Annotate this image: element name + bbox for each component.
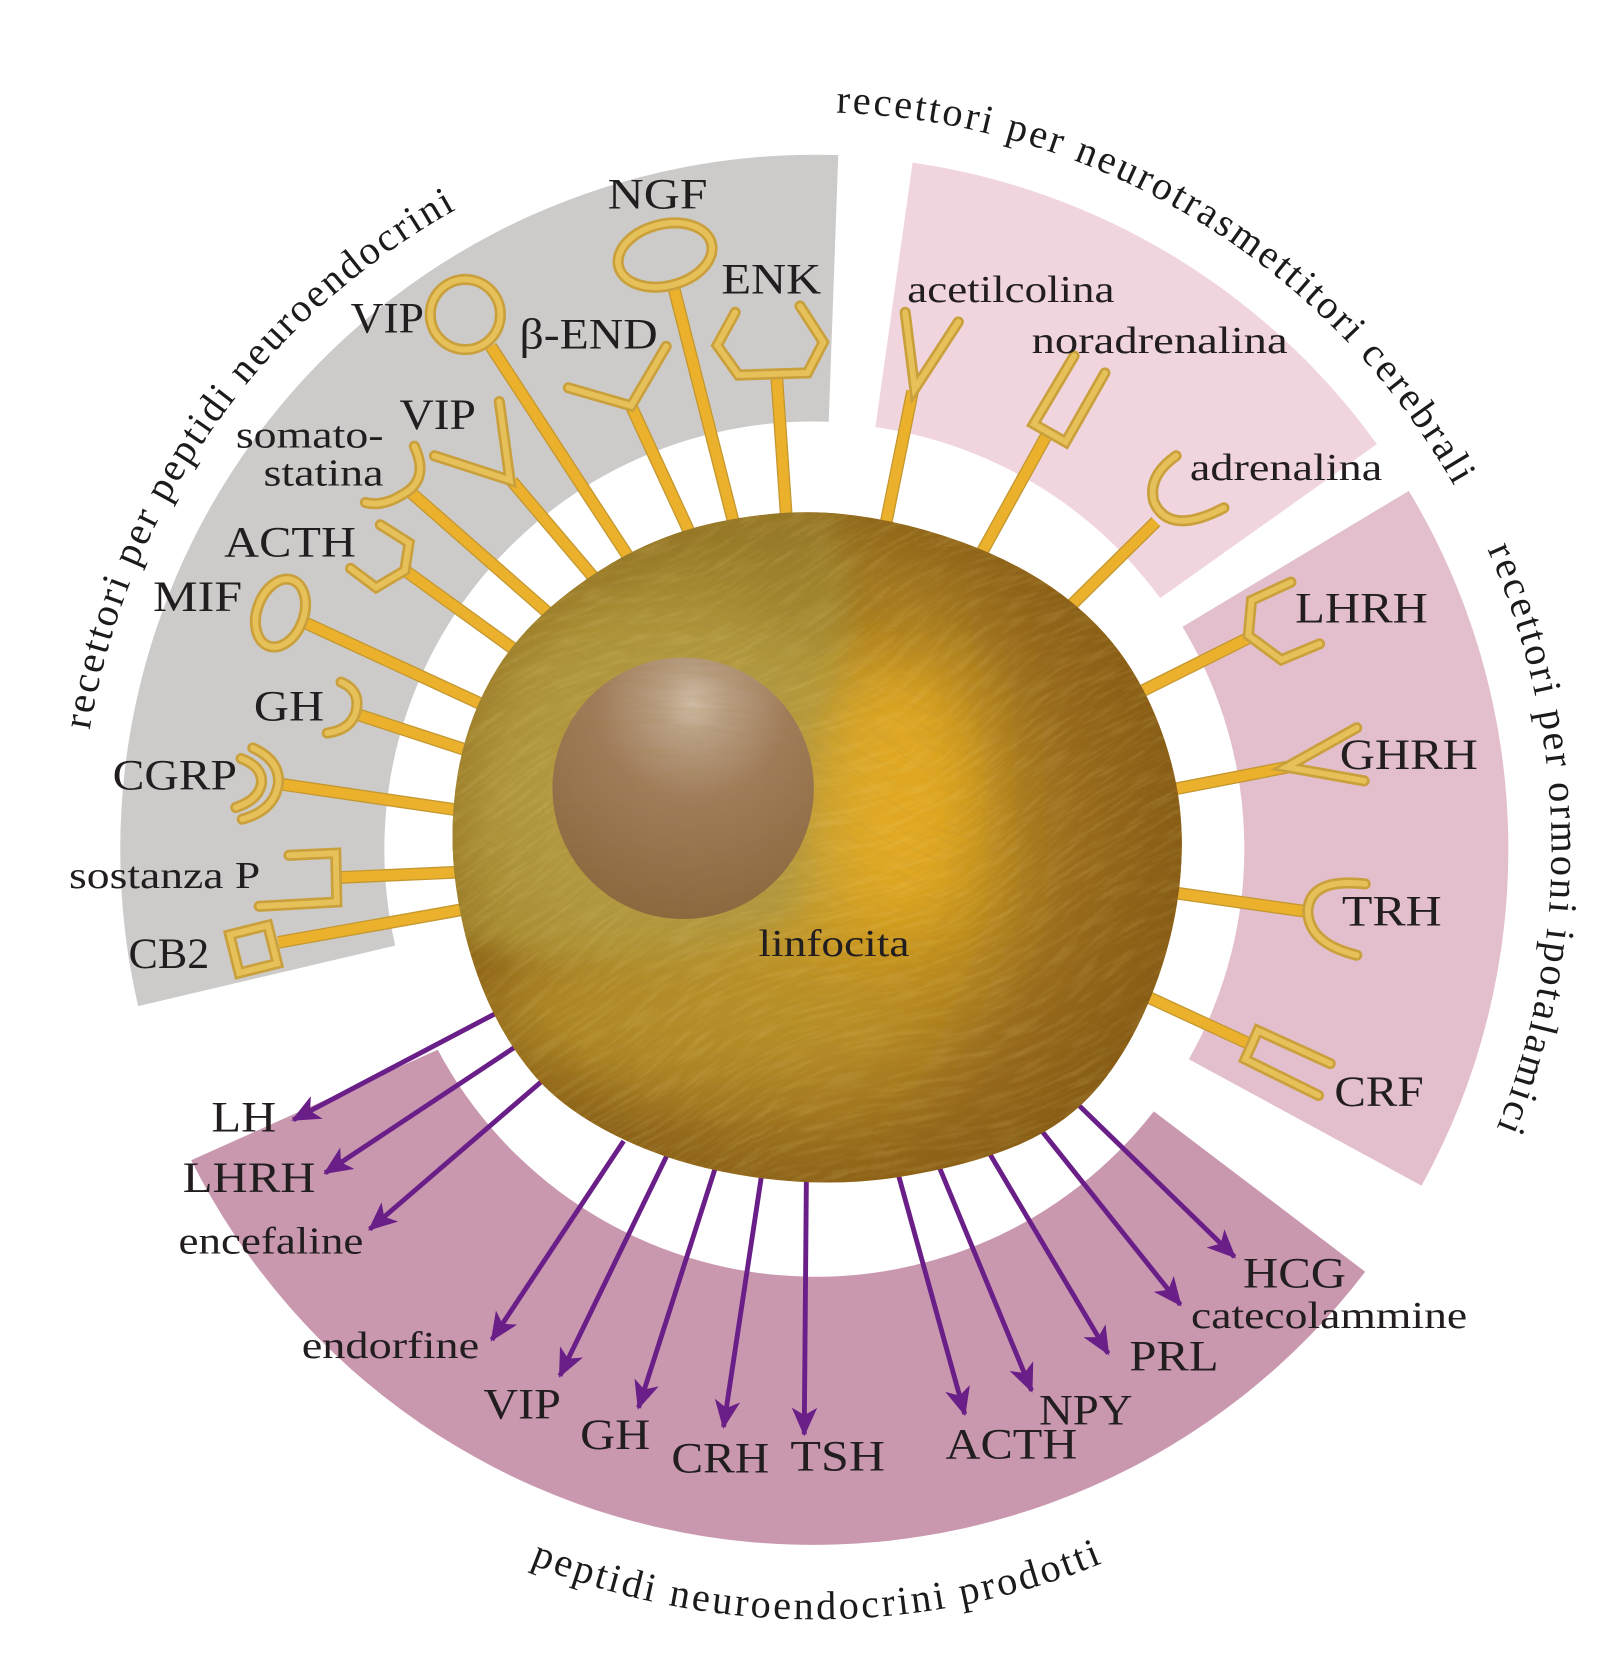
product labels: TSH bbox=[790, 1432, 885, 1480]
receptor labels: grey panel: ENK bbox=[721, 255, 821, 303]
receptor labels: grey panel: statina bbox=[263, 453, 384, 495]
receptor: CB2 bbox=[230, 909, 463, 973]
product labels: CRH bbox=[671, 1435, 769, 1483]
panel: recettori per neurotrasmettitori cerebrali bbox=[875, 163, 1377, 598]
receptor: ENK bbox=[717, 306, 823, 514]
product labels: endorfine bbox=[302, 1325, 479, 1367]
receptor: GH bbox=[327, 682, 466, 750]
receptor labels: neurotransmitters: adrenalina bbox=[1190, 447, 1382, 489]
receptor: ACTH bbox=[351, 525, 523, 656]
receptor: TRH bbox=[1172, 883, 1365, 955]
receptor labels: hypothalamic hormones: TRH bbox=[1342, 887, 1442, 935]
cell: nucleus bbox=[552, 658, 814, 919]
receptor: MIF bbox=[247, 572, 487, 707]
receptor: acetilcolina bbox=[885, 312, 958, 528]
receptor labels: hypothalamic hormones bbox=[1295, 585, 1478, 1116]
panel: recettori per peptidi neuroendocrini bbox=[120, 155, 838, 1006]
heading: peptidi neuroendocrini prodotti: peptidi neuroendocrini prodotti bbox=[528, 1540, 1102, 1620]
receptor labels: grey panel: CGRP bbox=[113, 751, 237, 799]
product labels: ACTH bbox=[946, 1421, 1077, 1469]
receptor labels: grey panel: GH bbox=[254, 682, 324, 730]
receptor labels: neurotransmitters: acetilcolina bbox=[907, 269, 1115, 311]
receptor labels: neurotransmitters bbox=[907, 269, 1382, 489]
receptor labels: neurotransmitters: noradrenalina bbox=[1032, 320, 1288, 362]
heading: recettori per ormoni ipotalamici: recettori per ormoni ipotalamici bbox=[1488, 542, 1576, 1134]
product labels: HCG bbox=[1243, 1250, 1346, 1298]
receptor: adrenalina bbox=[1071, 456, 1224, 606]
receptor labels: grey panel: sostanza P bbox=[69, 855, 260, 897]
receptor: CGRP bbox=[236, 748, 455, 819]
receptor: NGF bbox=[611, 214, 733, 521]
receptor labels: hypothalamic hormones: LHRH bbox=[1295, 585, 1428, 633]
label: linfocita: linfocita bbox=[759, 923, 909, 965]
receptor labels: grey panel: VIP bbox=[351, 295, 424, 343]
product labels: encefaline bbox=[178, 1221, 363, 1263]
receptor labels: grey panel: somato- bbox=[236, 414, 384, 456]
product labels: NPY bbox=[1039, 1387, 1133, 1435]
heading: recettori per neurotrasmettitori cerebrali: recettori per neurotrasmettitori cerebrali bbox=[836, 94, 1475, 486]
cell: linfocita body bbox=[452, 512, 1182, 1182]
receptor: CRF bbox=[1140, 993, 1330, 1095]
product labels: VIP bbox=[483, 1380, 561, 1428]
receptor: somatostatina bbox=[365, 446, 557, 620]
product labels: PRL bbox=[1129, 1333, 1219, 1381]
receptor: noradrenalina bbox=[981, 356, 1105, 555]
arrows: peptidi prodotti bbox=[293, 1010, 1235, 1434]
receptor: beta-END bbox=[568, 346, 688, 530]
product labels bbox=[178, 1094, 1467, 1483]
receptor: VIP ring bbox=[430, 279, 629, 558]
receptor: sostanza P bbox=[259, 853, 457, 906]
receptor labels: grey panel: VIP bbox=[399, 391, 476, 439]
panel: peptidi neuroendocrini prodotti bbox=[191, 1050, 1365, 1545]
receptor: VIP fork bbox=[435, 402, 601, 586]
product labels: catecolammine bbox=[1191, 1295, 1467, 1337]
heading: recettori per peptidi neuroendocrini: recettori per peptidi neuroendocrini bbox=[71, 188, 456, 730]
product labels: LH bbox=[211, 1094, 276, 1142]
receptor labels: grey panel: MIF bbox=[153, 573, 242, 621]
receptor labels: hypothalamic hormones: CRF bbox=[1334, 1068, 1424, 1116]
receptor labels: hypothalamic hormones: GHRH bbox=[1340, 731, 1478, 779]
receptor labels: grey panel: β-END bbox=[520, 311, 658, 359]
panel: recettori per ormoni ipotalamici bbox=[1182, 491, 1508, 1186]
product labels: LHRH bbox=[183, 1154, 316, 1202]
receptor: LHRH bbox=[1137, 582, 1320, 694]
receptor: GHRH bbox=[1173, 728, 1364, 789]
receptor labels: grey panel: NGF bbox=[608, 170, 708, 218]
receptor labels: grey panel bbox=[69, 170, 821, 978]
product labels: GH bbox=[580, 1411, 650, 1459]
receptor labels: grey panel: ACTH bbox=[224, 519, 356, 567]
receptor labels: grey panel: CB2 bbox=[129, 930, 209, 978]
